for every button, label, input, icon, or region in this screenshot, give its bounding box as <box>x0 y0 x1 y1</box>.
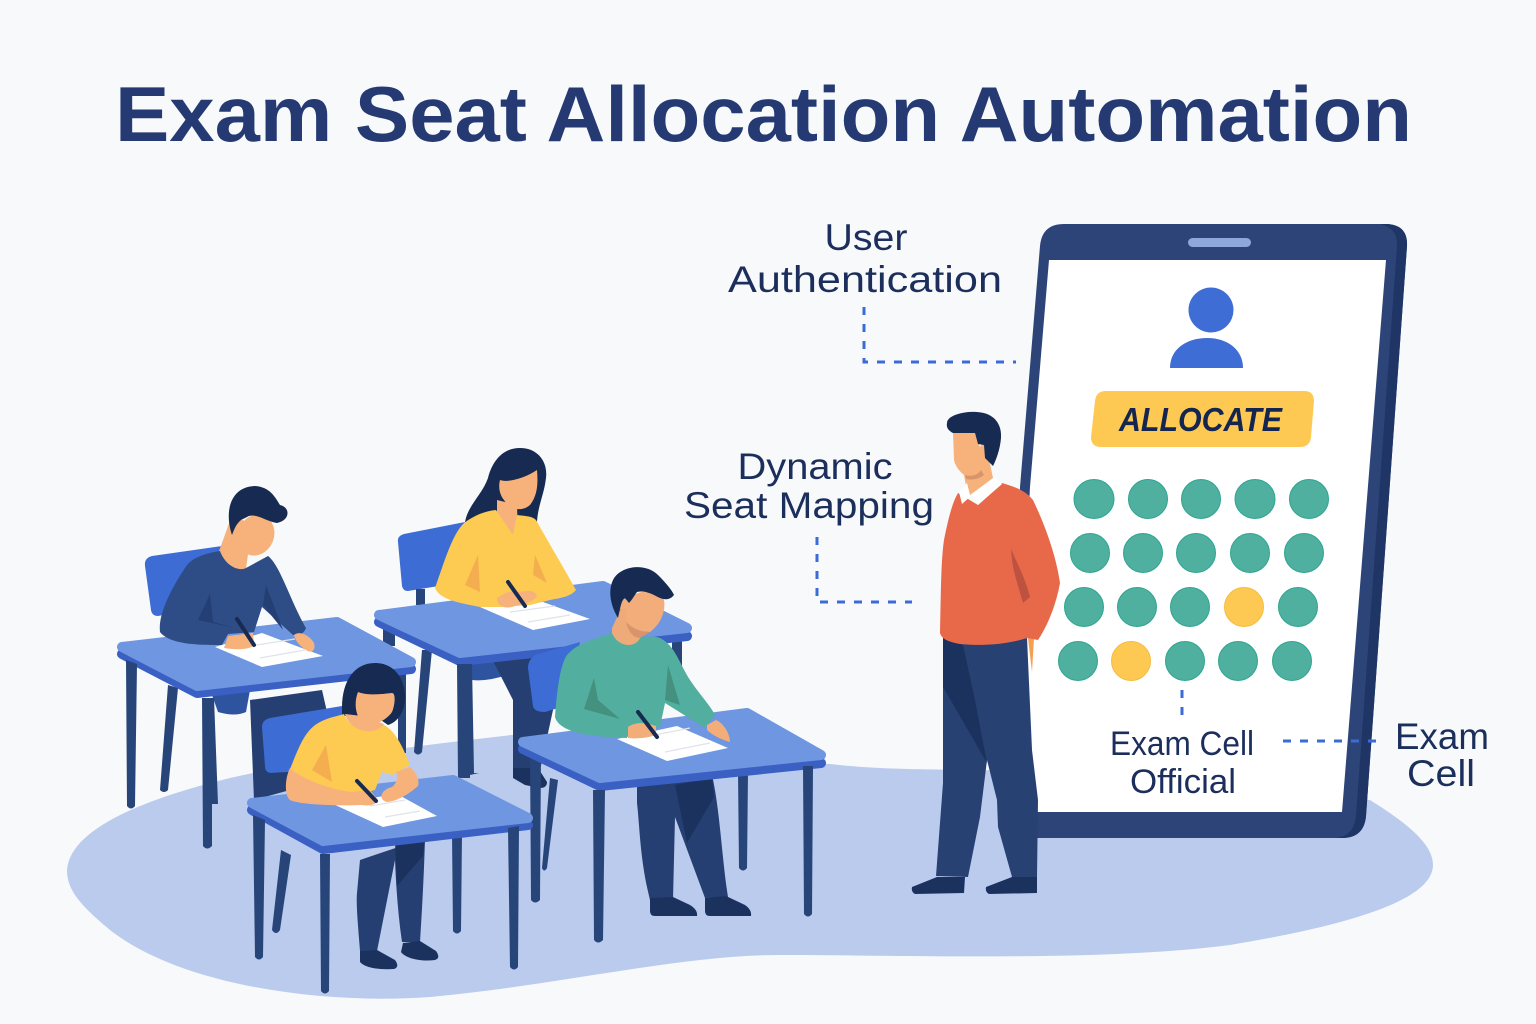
student 3 shoes <box>360 941 438 969</box>
official chin shadow <box>965 470 984 480</box>
desk D front legs <box>253 815 519 994</box>
student 3 arms <box>286 767 419 805</box>
student 1 hair <box>229 486 288 535</box>
student 4 with desk: green sweater <box>523 567 821 942</box>
student 2 hair back <box>465 448 546 522</box>
desk C front legs <box>593 766 813 942</box>
label: user authentication: User <box>824 217 908 258</box>
tablet screen <box>1012 260 1386 812</box>
student 2 trousers and shoe <box>490 650 553 788</box>
label: user authentication <box>728 217 1002 300</box>
floor blob <box>67 733 1433 999</box>
seat grid <box>1058 480 1328 680</box>
official trouser shadow <box>943 638 987 763</box>
official shoes <box>912 877 1037 894</box>
student 3 neck <box>345 714 384 731</box>
label: exam cell: Cell <box>1407 753 1475 794</box>
tablet body <box>1005 224 1407 838</box>
student 4 face <box>626 592 664 632</box>
student 1 sweater <box>160 551 306 645</box>
student 3 fold <box>312 745 332 782</box>
chair C <box>528 642 580 712</box>
chair A <box>145 546 222 616</box>
student 2 sweater <box>435 510 576 607</box>
student 1 trousers <box>250 690 345 800</box>
student 2 pencil <box>508 582 525 606</box>
desk A front legs <box>126 660 218 848</box>
student 4 trousers <box>637 775 728 900</box>
icon: user <box>1170 288 1243 368</box>
official collar <box>959 477 1002 505</box>
paper B <box>480 602 590 630</box>
student 2 neck <box>497 500 518 536</box>
student 2 hands <box>497 591 537 607</box>
allocate button: ALLOCATE <box>1118 401 1283 438</box>
paper C <box>617 726 728 761</box>
label: dynamic seat mapping: Dynamic <box>738 446 892 487</box>
label: dynamic seat mapping <box>684 446 934 526</box>
student 3 hair <box>342 663 405 725</box>
student 4 shoes <box>650 896 751 916</box>
student 4 chin shadow <box>626 622 650 638</box>
title: Exam Seat Allocation Automation <box>115 70 1412 158</box>
student 1 face <box>231 509 281 561</box>
tablet side shade <box>1336 224 1407 838</box>
connector: dynamic seat mapping <box>817 537 912 602</box>
desk B top <box>379 586 687 661</box>
official trousers <box>936 637 1038 877</box>
label: dynamic seat mapping: Seat Mapping <box>684 485 934 526</box>
label: exam cell: Exam <box>1395 716 1489 757</box>
student 3 pencil <box>357 781 376 801</box>
official hair <box>947 412 1001 466</box>
student 4 sweater <box>555 633 715 738</box>
student 2 sweater folds <box>465 555 547 592</box>
official neck and face <box>953 433 993 497</box>
desk A top <box>122 622 411 693</box>
student 4 neck <box>612 600 640 648</box>
label: exam cell official: Exam Cell <box>1110 725 1254 763</box>
connector: official to exam cell <box>1283 740 1376 742</box>
student 1 pencil <box>237 619 254 645</box>
allocate button <box>1091 391 1314 447</box>
chair D <box>262 705 348 773</box>
student 3 face <box>356 692 395 724</box>
label: exam cell <box>1395 716 1489 794</box>
student 1 hands <box>224 633 315 652</box>
student 1 neck <box>218 515 250 570</box>
label: user authentication: Authentication <box>728 259 1002 300</box>
student 2 face <box>499 470 537 509</box>
student 1 with desk: navy sweater <box>122 486 411 848</box>
student 4 hair <box>610 567 674 618</box>
desk B front leg <box>457 664 479 778</box>
student 1 ear <box>233 520 249 536</box>
official sleeve fold <box>1011 549 1030 603</box>
student 2 with desk: yellow sweater, long hair <box>379 448 687 788</box>
seat A <box>212 690 250 714</box>
desk A back legs <box>160 665 406 792</box>
student 4 ear <box>618 598 628 610</box>
student 1 fold <box>198 585 283 630</box>
tablet <box>1005 224 1407 838</box>
student 3 t-shirt <box>290 714 410 795</box>
connector: user authentication <box>864 307 1016 362</box>
student 4 hands <box>628 720 730 742</box>
desk C top <box>523 713 821 786</box>
student 3 trousers <box>357 838 425 951</box>
official hand sliver <box>1028 638 1034 672</box>
tablet speaker <box>1188 238 1251 247</box>
student 4 folds <box>584 665 680 719</box>
desk D top <box>252 780 528 849</box>
paper D <box>333 794 437 827</box>
label: exam cell official <box>1110 725 1254 801</box>
exam cell official figure <box>912 412 1060 894</box>
paper A <box>215 633 323 667</box>
official sweater <box>940 483 1060 645</box>
desk B back legs <box>383 622 682 754</box>
desk D back legs <box>272 833 462 934</box>
connector: seat grid to official label <box>1180 690 1184 716</box>
label: exam cell official: Official <box>1130 763 1236 801</box>
desk C back legs <box>530 750 748 902</box>
student 3 with desk: yellow t-shirt, short hair <box>252 663 528 994</box>
chair B <box>398 522 520 680</box>
student 4 pencil <box>638 712 657 737</box>
